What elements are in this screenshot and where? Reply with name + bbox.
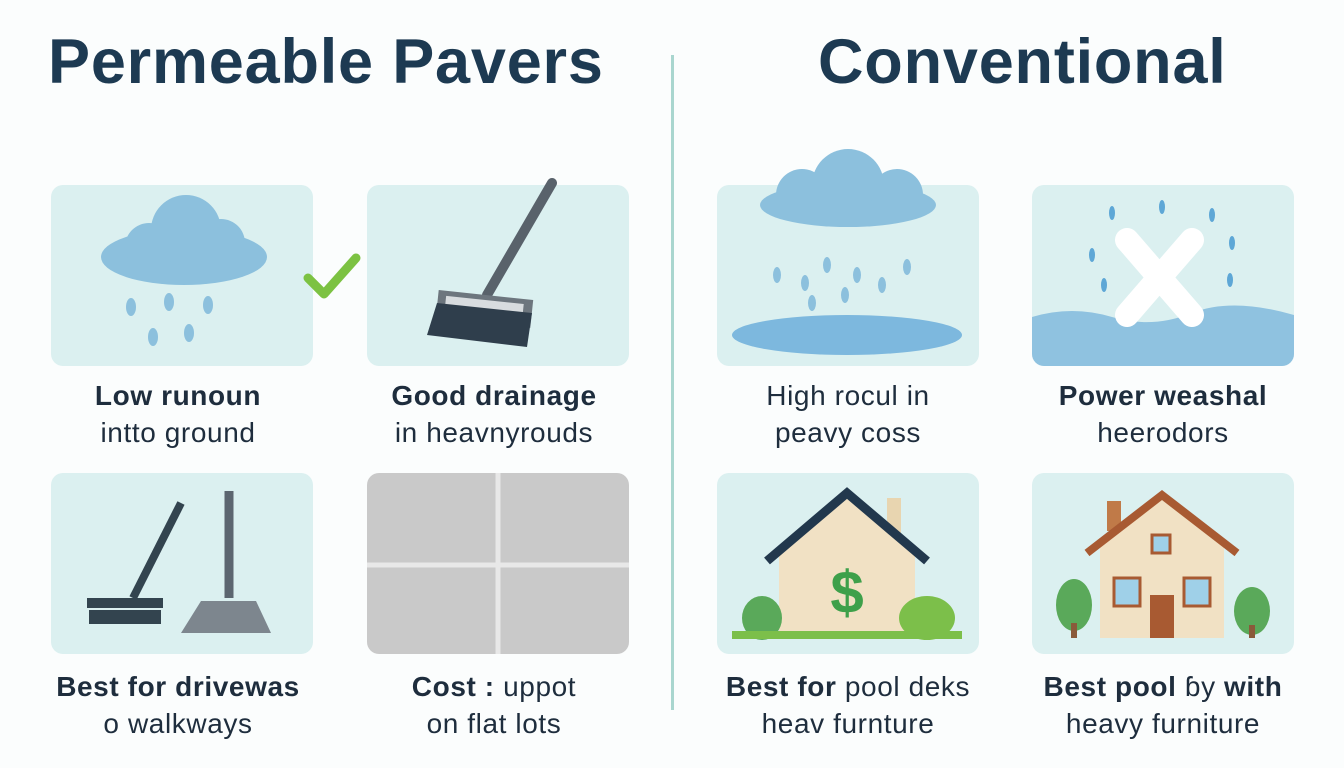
label: heavy furniture: heavy furniture — [1066, 708, 1260, 739]
icon: rain cloud — [101, 195, 267, 346]
panel: drivesways — [51, 473, 313, 654]
label: heavy furniture: Best pool ɓy with — [1044, 671, 1282, 702]
divider — [671, 55, 674, 710]
panel: pool decks — [717, 473, 979, 654]
label: drivesways — [56, 671, 300, 739]
label: power washing: Power weashal — [1059, 380, 1267, 411]
panel: cost — [367, 473, 629, 654]
icon: house with dollar: $ — [830, 559, 864, 626]
label: cost: on flat lots — [427, 708, 561, 739]
panel: power washing — [1032, 185, 1294, 366]
label: high runoff — [766, 380, 930, 448]
label: good drainage: Good drainage — [391, 380, 597, 411]
panel: high runoff — [717, 185, 979, 366]
label: low runoff: Low runoun — [95, 380, 261, 411]
icon: broom — [427, 183, 552, 347]
label: low runoff: intto ground — [100, 417, 256, 448]
icon: water with x — [1032, 200, 1294, 366]
icon: house with dollar — [732, 493, 962, 640]
panel: heavy furniture — [1032, 473, 1294, 654]
label: good drainage: in heavnyrouds — [395, 417, 593, 448]
label: power washing: heerodors — [1097, 417, 1229, 448]
icon: two brooms — [87, 491, 271, 633]
title: conventional: Conventional — [818, 27, 1227, 97]
icon: check mark — [304, 254, 360, 298]
label: good drainage — [391, 380, 597, 448]
icon: house with trees — [1056, 495, 1270, 638]
label: cost: Cost : uppot — [412, 671, 576, 702]
icon: cloud with puddle — [732, 149, 962, 355]
icon: paver tiles — [367, 473, 629, 654]
label: pool decks: Best for pool deks — [726, 671, 970, 702]
label: cost — [412, 671, 576, 739]
label: low runoff — [95, 380, 261, 448]
title: permeable pavers: Permeable Pavers — [48, 27, 604, 97]
label: high runoff: High rocul in — [766, 380, 930, 411]
label: heavy furniture — [1044, 671, 1282, 739]
label: pool decks — [726, 671, 970, 739]
panel: low runoff — [51, 185, 313, 366]
label: high runoff: peavy coss — [775, 417, 921, 448]
label: drivesways: Best for drivewas — [56, 671, 300, 702]
label: power washing — [1059, 380, 1267, 448]
label: drivesways: o walkways — [103, 708, 253, 739]
label: pool decks: heav furnture — [762, 708, 934, 739]
panel: good drainage — [367, 185, 629, 366]
